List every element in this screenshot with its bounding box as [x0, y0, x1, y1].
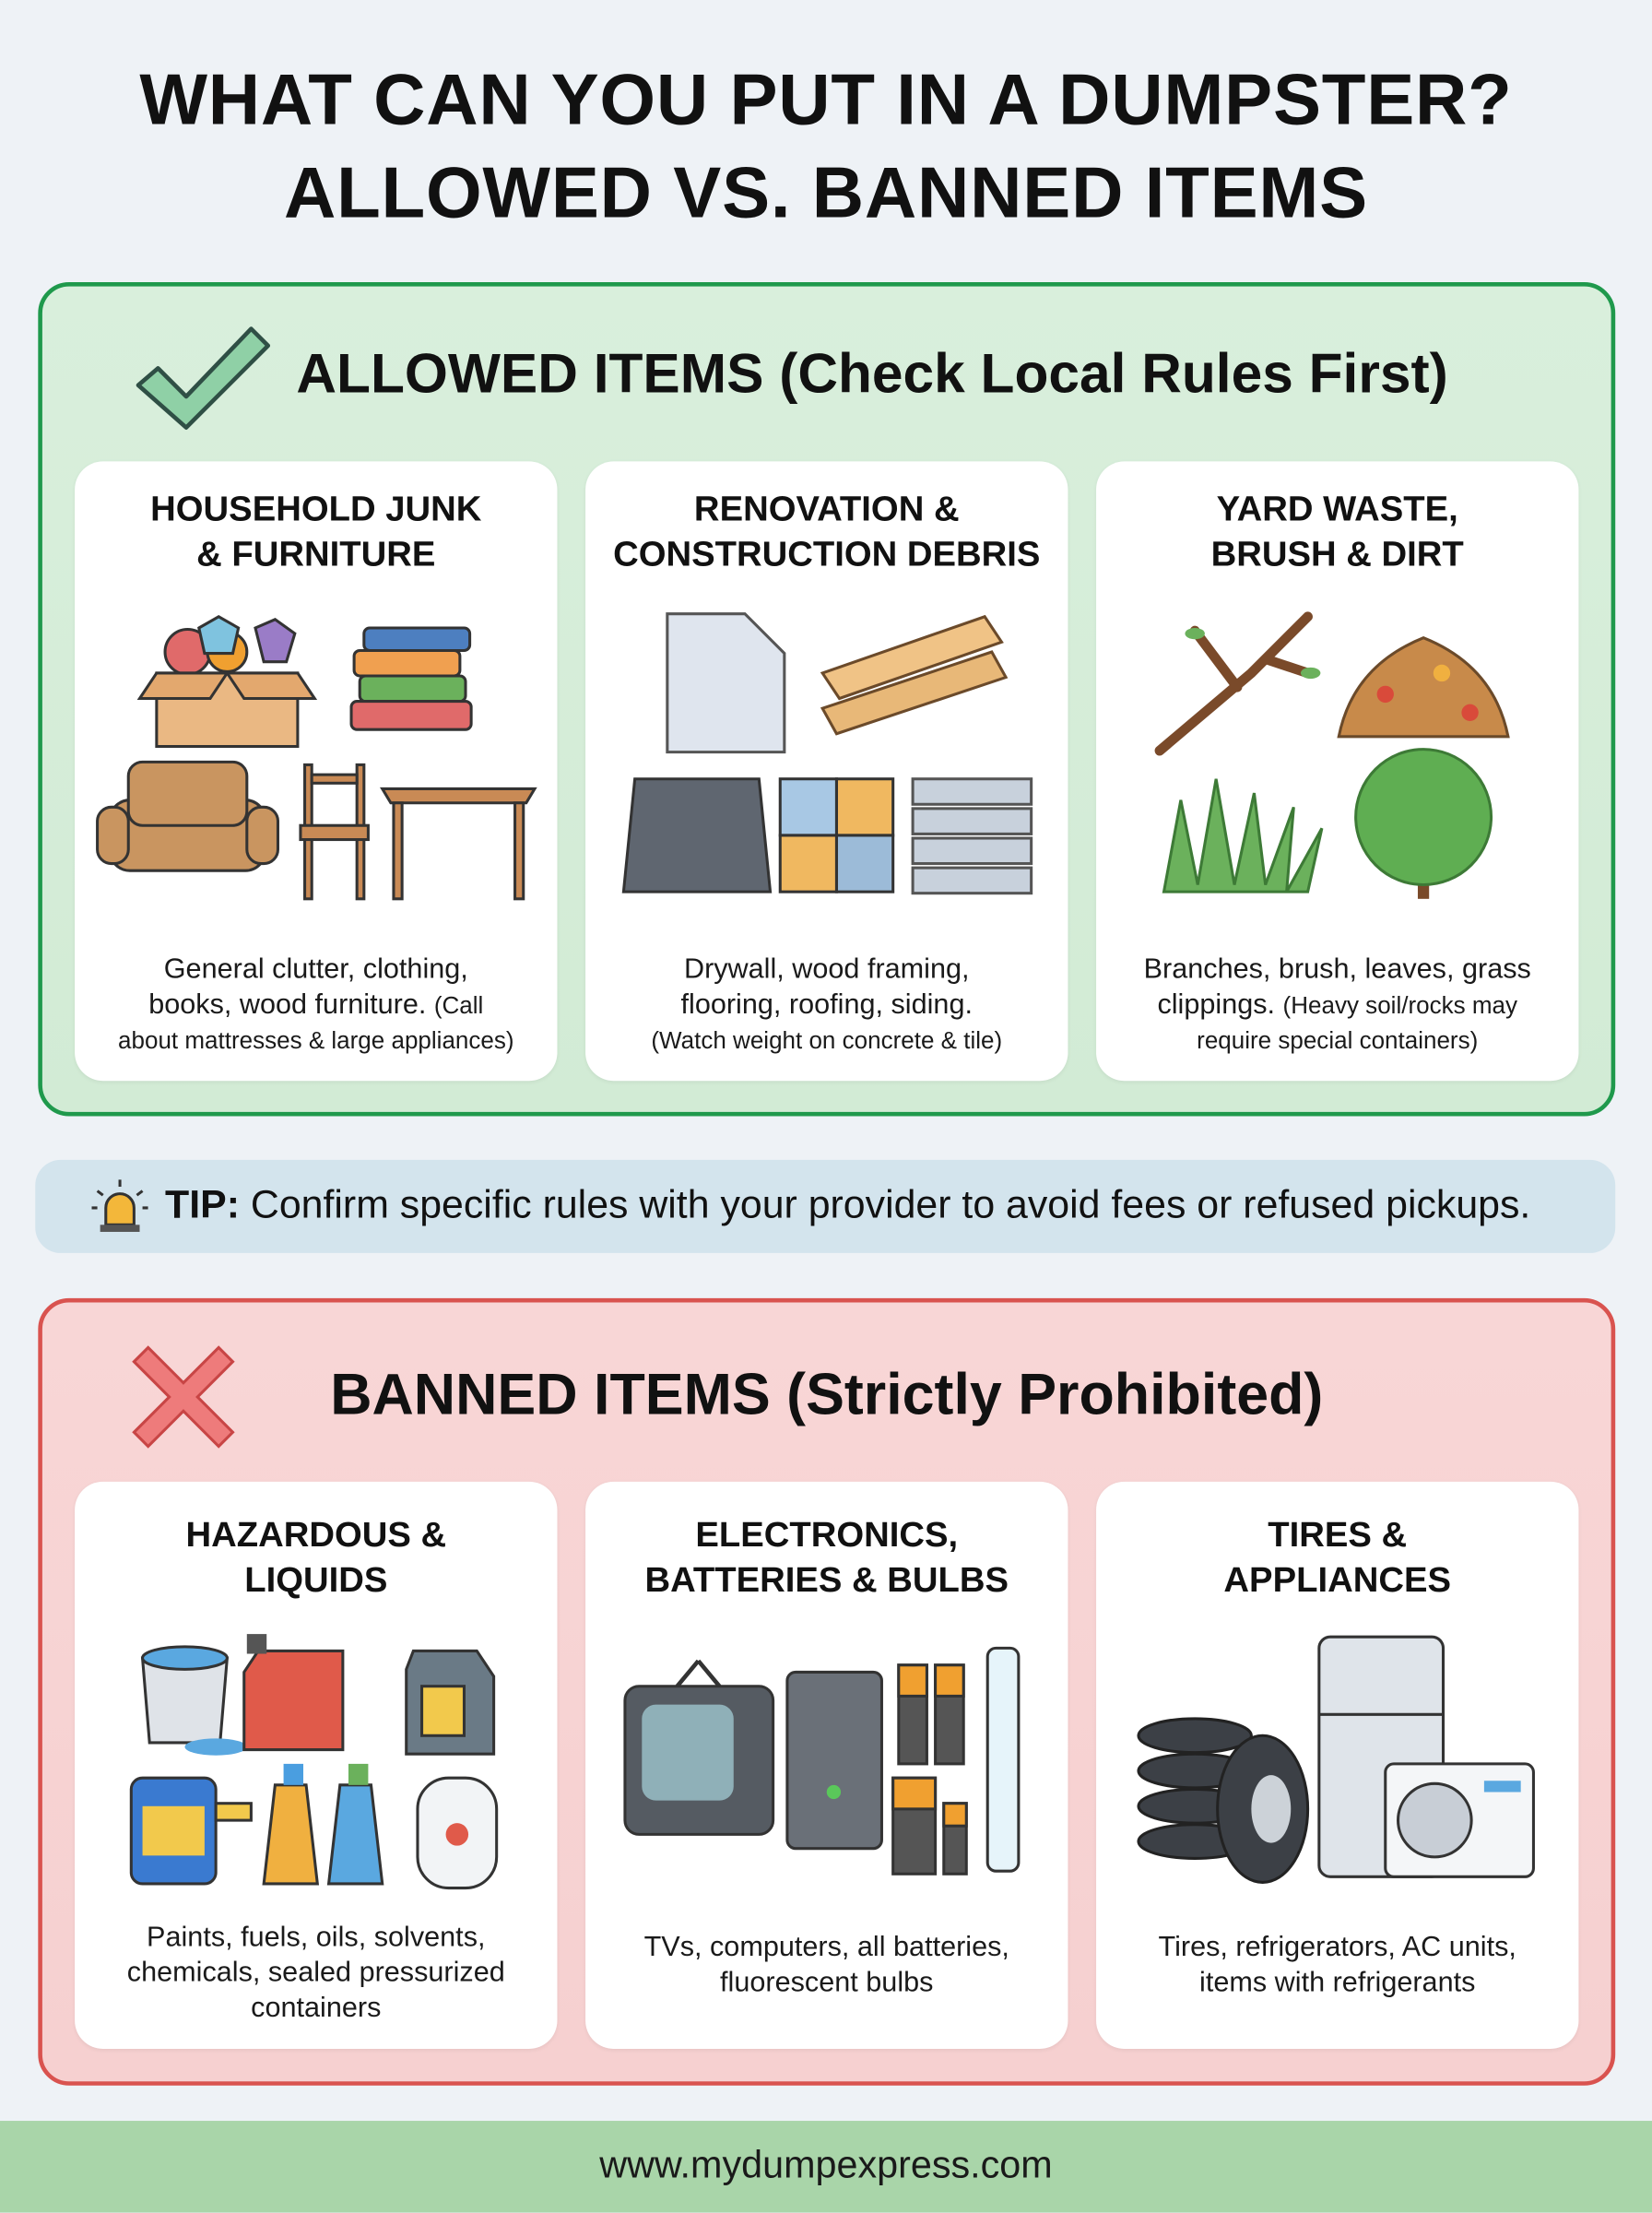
card title: CONSTRUCTION DEBRIS [613, 535, 1040, 574]
title: ALLOWED VS. BANNED ITEMS [284, 152, 1368, 233]
card title: YARD WASTE, [1217, 490, 1458, 529]
card: electronics [585, 1482, 1068, 2049]
card: hazardous [75, 1482, 557, 2049]
tip bar [35, 1160, 1615, 1253]
card title: HAZARDOUS & [185, 1516, 446, 1555]
tip text: TIP: Confirm specific rules with your provider to avoid fees or refused pickups. [165, 1182, 1530, 1226]
footer: www.mydumpexpress.com [599, 2144, 1053, 2185]
description: Tires, refrigerators, AC units, [1159, 1932, 1516, 1963]
card: renovation debris [585, 461, 1068, 1081]
description [644, 1932, 1009, 1998]
description: Branches, brush, leaves, grass [1144, 953, 1531, 985]
description: require special containers) [1197, 1027, 1478, 1054]
card title [1223, 1516, 1451, 1600]
description: books, wood furniture. (Call [148, 989, 483, 1020]
card title: TIRES & [1268, 1516, 1407, 1555]
description: clippings. (Heavy soil/rocks may [1157, 989, 1517, 1020]
title [139, 59, 1513, 233]
description: containers [251, 1993, 381, 2023]
icon: bulb [92, 1179, 148, 1232]
description: General clutter, clothing, [164, 953, 468, 985]
description: (Watch weight on concrete & tile) [651, 1027, 1002, 1054]
description: about mattresses & large appliances) [118, 1027, 514, 1054]
description [651, 953, 1002, 1054]
icons: yard [1154, 611, 1510, 899]
card title [613, 490, 1040, 574]
description: Drywall, wood framing, [684, 953, 970, 985]
description [118, 953, 514, 1054]
icon: check mark [136, 326, 271, 430]
card: yard waste [1096, 461, 1578, 1081]
description: flooring, roofing, siding. [681, 989, 973, 1020]
card title [1211, 490, 1464, 574]
panel: allowed items [38, 282, 1615, 1116]
card title: APPLIANCES [1223, 1561, 1451, 1600]
description: chemicals, sealed pressurized [127, 1958, 505, 1988]
panel: banned items [38, 1298, 1615, 2086]
description [127, 1922, 505, 2023]
card title: RENOVATION & [694, 490, 960, 529]
card title [185, 1516, 446, 1600]
description: Paints, fuels, oils, solvents, [147, 1922, 485, 1953]
card title: HOUSEHOLD JUNK [150, 490, 481, 529]
card: household junk [75, 461, 557, 1081]
card title: ELECTRONICS, [695, 1516, 958, 1555]
footer [0, 2121, 1652, 2213]
card title: BATTERIES & BULBS [644, 1561, 1009, 1600]
icons: electronics [623, 1647, 1020, 1876]
description: fluorescent bulbs [720, 1967, 933, 1998]
icon: x mark [132, 1345, 235, 1449]
icons: tires & appliances [1137, 1636, 1535, 1884]
card: tires [1096, 1482, 1578, 2049]
icons: construction [621, 612, 1032, 894]
description [1144, 953, 1531, 1054]
icons: hazardous [129, 1634, 498, 1890]
heading: allowed: ALLOWED ITEMS (Check Local Rules First) [296, 343, 1448, 405]
description: TVs, computers, all batteries, [644, 1932, 1009, 1963]
card title: BRUSH & DIRT [1211, 535, 1464, 574]
description [1159, 1932, 1516, 1998]
heading: banned: BANNED ITEMS (Strictly Prohibited) [330, 1362, 1323, 1426]
description: items with refrigerants [1199, 1967, 1475, 1998]
title: WHAT CAN YOU PUT IN A DUMPSTER? [139, 59, 1513, 140]
card title: LIQUIDS [244, 1561, 387, 1600]
icons: household [96, 615, 537, 900]
card title [150, 490, 481, 574]
card title [644, 1516, 1009, 1600]
card title: & FURNITURE [196, 535, 435, 574]
